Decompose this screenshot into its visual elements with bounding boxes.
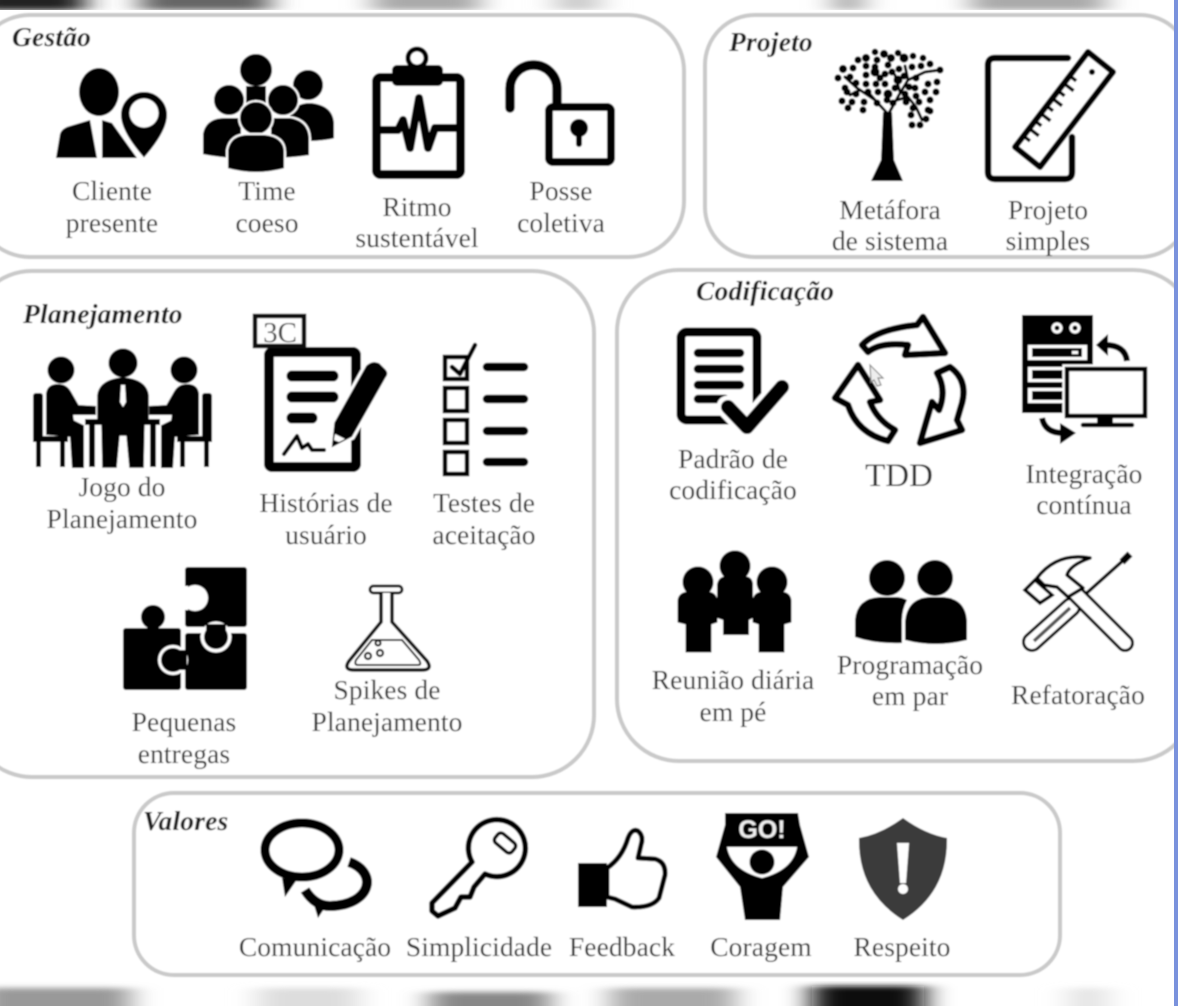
- label: Time: [238, 175, 296, 206]
- label: em par: [872, 680, 948, 711]
- label: aceitação: [432, 519, 536, 550]
- label: Spikes de: [333, 674, 441, 705]
- icon: cycle arrows: [835, 317, 964, 443]
- heading: Valores: [143, 805, 228, 836]
- panel: Gestão: [0, 15, 684, 257]
- label: Coragem: [710, 931, 812, 962]
- heading: Gestão: [12, 21, 91, 52]
- icon: checklist: [445, 345, 524, 474]
- panel frame: [705, 15, 1178, 257]
- icon: speech bubbles: [265, 823, 367, 918]
- icon: document with pencil and 3C tag: [255, 316, 389, 467]
- icon: hammer and screwdriver: [1025, 554, 1130, 643]
- icon: document with pencil and 3C tag: 3C: [263, 317, 297, 349]
- icon: two people: [855, 560, 967, 644]
- icon: key: [432, 820, 525, 916]
- panel frame: [0, 271, 594, 777]
- item: Refatoração: [1011, 554, 1145, 710]
- label: contínua: [1036, 489, 1132, 520]
- blue right edge strip: [1174, 0, 1178, 1006]
- item: Time coeso: [202, 53, 335, 238]
- label: sustentável: [355, 222, 479, 253]
- label: Posse: [529, 175, 593, 206]
- item: Programação em par: [837, 560, 983, 711]
- label: Planejamento: [47, 503, 197, 534]
- item: Cliente presente: [56, 68, 168, 238]
- icon part: chairs: [33, 393, 43, 440]
- item: Simplicidade: [406, 820, 552, 962]
- icon: puzzle: [123, 567, 247, 690]
- icon: pad with ruler: [988, 52, 1113, 179]
- item: Testes de aceitação: [432, 345, 536, 550]
- heading: Planejamento: [22, 298, 183, 329]
- label: Histórias de: [259, 487, 393, 518]
- item: Padrão de codificação: [669, 332, 797, 505]
- icon part: table: [85, 419, 160, 425]
- label: codificação: [669, 474, 797, 505]
- panel: Codificação: [617, 270, 1178, 761]
- item: Pequenas entregas: [123, 567, 247, 769]
- label: Jogo do: [78, 471, 166, 502]
- label: Reunião diária: [652, 664, 814, 695]
- label: coeso: [235, 207, 299, 238]
- item: Metáfora de sistema: [832, 49, 948, 256]
- label: presente: [66, 207, 158, 238]
- label: coletiva: [517, 207, 605, 238]
- icon: person holding GO sign: [716, 813, 809, 920]
- label: Padrão de: [678, 443, 788, 474]
- icon: standing people: [678, 550, 791, 652]
- label: TDD: [865, 458, 933, 494]
- label: usuário: [285, 519, 367, 550]
- label: Respeito: [853, 931, 951, 962]
- icon: person holding GO sign: GO!: [738, 816, 786, 844]
- panel: Planejamento: [0, 271, 594, 777]
- icon: clipboard with pulse: [376, 49, 460, 174]
- heading: Codificação: [696, 275, 834, 306]
- item: Projeto simples: [988, 52, 1113, 256]
- icon: shield with exclamation: [859, 818, 947, 920]
- item: Coragem: [710, 813, 812, 962]
- label: em pé: [700, 696, 766, 727]
- label: Simplicidade: [406, 931, 552, 962]
- label: Metáfora: [839, 194, 941, 225]
- label: Integração: [1025, 458, 1143, 489]
- item: Comunicação: [239, 823, 391, 962]
- label: entregas: [138, 738, 230, 769]
- item: Histórias de usuário: [255, 316, 393, 550]
- item: Integração contínua: [1022, 315, 1145, 520]
- icon: tree: [835, 49, 943, 181]
- blurred strip: top: [0, 0, 1105, 10]
- item: Reunião diária em pé: [652, 550, 814, 727]
- cursor: [870, 365, 883, 386]
- icon: server and monitor: [1022, 315, 1145, 444]
- label: Comunicação: [239, 931, 391, 962]
- item: Feedback: [569, 830, 675, 962]
- item: Posse coletiva: [510, 65, 611, 238]
- label: Ritmo: [382, 191, 452, 222]
- panel: Projeto: [705, 15, 1178, 257]
- label: Planejamento: [312, 706, 462, 737]
- item: TDD: [835, 317, 964, 494]
- label: Testes de: [433, 487, 535, 518]
- item: Jogo do Planejamento: [33, 348, 212, 534]
- heading: Projeto: [728, 26, 813, 57]
- blurred strip: bottom: [0, 986, 1108, 1006]
- panel frame: [617, 270, 1178, 761]
- icon: team: [202, 53, 335, 173]
- item: Ritmo sustentável: [355, 49, 479, 253]
- icon: document with check: [681, 332, 782, 427]
- label: Refatoração: [1011, 679, 1145, 710]
- label: Programação: [837, 649, 983, 680]
- label: Projeto: [1008, 194, 1088, 225]
- label: Feedback: [569, 931, 675, 962]
- icon part: centre person: [98, 378, 148, 467]
- icon: meeting at table: [33, 348, 212, 467]
- icon part: right person: [150, 385, 198, 467]
- panel frame: [0, 15, 684, 257]
- icon part: left person: [47, 385, 95, 467]
- label: de sistema: [832, 225, 948, 256]
- panel frame: [134, 793, 1060, 975]
- item: Respeito: [853, 818, 951, 962]
- icon: thumbs up: [578, 830, 665, 907]
- icon: flask: [347, 586, 429, 670]
- icon: client with map pin: [56, 68, 168, 159]
- panel: Valores: [134, 793, 1060, 975]
- label: Cliente: [72, 175, 152, 206]
- icon: open padlock: [510, 65, 611, 162]
- item: Spikes de Planejamento: [312, 586, 462, 737]
- label: simples: [1006, 225, 1090, 256]
- label: Pequenas: [132, 706, 236, 737]
